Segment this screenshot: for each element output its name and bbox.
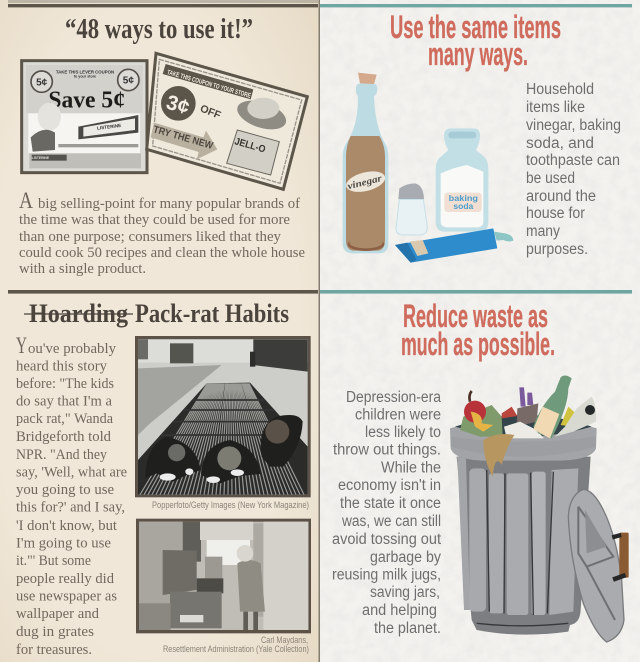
icon: vinegar bottle: vinegar xyxy=(346,173,383,192)
text: pack rat story: say, 'Well, what are xyxy=(16,464,127,480)
coupon: Save 5 cents Listerine: 5¢ xyxy=(123,76,134,87)
text: big selling-point: the time was that they could be used for more xyxy=(19,212,290,228)
coupon: Save 5 cents Listerine: LISTERINE xyxy=(32,156,50,160)
text: pack rat story: do say that I'm a xyxy=(16,394,113,410)
heading: use the same items xyxy=(390,9,561,72)
icon: baking soda jar: baking xyxy=(449,194,478,203)
trash can lid xyxy=(568,489,629,642)
coupon: Save 5 cents Listerine: Save 5¢ xyxy=(48,86,125,113)
text: depression-era children: less likely to xyxy=(365,424,441,441)
text: depression-era children: and helping xyxy=(362,602,437,619)
text: household items: house for xyxy=(526,205,585,222)
text: pack rat story: you going to use xyxy=(16,482,114,498)
text: big selling-point: big selling-point for many popular brands of xyxy=(38,196,300,212)
text: pack rat story: it."' But some xyxy=(16,553,91,569)
panel: use the same items xyxy=(343,9,621,263)
text: pack rat story: for treasures. xyxy=(16,642,92,658)
text: pack rat story: I'm going to use xyxy=(16,536,111,552)
text: depression-era children: While the xyxy=(381,460,441,476)
text: pack rat story: ou've probably xyxy=(28,341,117,357)
text: depression-era children xyxy=(332,389,442,637)
text: depression-era children: Depression-era xyxy=(346,389,441,406)
text: depression-era children: children were xyxy=(355,406,441,424)
text: pack rat story: Y xyxy=(16,333,27,358)
coupon: Save 5 cents Listerine: 5¢ xyxy=(36,77,48,88)
coupon: 3 cents off Jell-O: JELL-O xyxy=(233,136,267,156)
photo: men looking through sidewalk grate xyxy=(135,336,311,497)
photo: girl in newspaper-walled kitchen xyxy=(136,519,311,633)
illustration: household items xyxy=(343,73,513,263)
text: depression-era children: the state it once xyxy=(340,495,441,512)
text: big selling-point xyxy=(19,188,305,277)
panel: left paper background xyxy=(0,0,319,662)
text: big selling-point: with a single product. xyxy=(19,261,146,277)
icon: vinegar bottle xyxy=(343,73,388,253)
panel: reduce waste xyxy=(332,298,629,642)
panel: pack-rat habits xyxy=(16,299,311,658)
heading: 48 ways: “48 ways to use it!” xyxy=(65,14,253,45)
text: household items: items like xyxy=(526,99,585,116)
icon: baking soda jar: soda xyxy=(453,202,474,211)
text: pack rat story: use newspaper as xyxy=(16,588,117,604)
heading: use the same items: many ways. xyxy=(428,36,528,72)
text: depression-era children: economy isn't in xyxy=(338,477,441,494)
coupon: 3 cents off Jell-O: TAKE THIS COUPON TO YOUR STORE xyxy=(166,69,252,100)
coupon: 3 cents off Jell-O xyxy=(147,53,307,189)
text: household items: be used xyxy=(526,170,575,187)
text: household items: Household xyxy=(526,81,594,98)
text: pack rat story: 'I don't know, but xyxy=(16,518,117,534)
panel: right paper background xyxy=(320,0,640,662)
text: pack rat story: wallpaper and xyxy=(16,606,100,622)
text: depression-era children: throw out things. xyxy=(333,442,441,458)
panel: 48 ways to use it xyxy=(19,14,307,277)
text: household items xyxy=(526,81,621,258)
coupon: 3 cents off Jell-O: OFF xyxy=(198,103,223,122)
coupon: 3 cents off Jell-O: 3¢ xyxy=(164,91,193,119)
coupon: Save 5 cents Listerine: TAKE THIS LEVER COUPON xyxy=(56,69,114,74)
text: household items: purposes. xyxy=(526,241,588,258)
text: pack rat story: before: "The kids xyxy=(16,376,114,392)
text: pack rat story: heard this story xyxy=(16,358,108,374)
text: household items: around the xyxy=(526,188,596,205)
text: big selling-point: than one purpose; consumers liked that they xyxy=(19,229,282,245)
text: depression-era children: saving jars, xyxy=(370,584,440,601)
text: pack rat story: dug in grates xyxy=(16,624,94,640)
trash contents xyxy=(460,376,596,477)
text: household items: vinegar, baking xyxy=(526,117,621,134)
icon: baking soda jar xyxy=(436,128,488,232)
heading: hoarding pack-rat habits: Hoarding xyxy=(29,299,128,328)
caption: Popperfoto: Popperfoto/Getty Images (New York Magazine) xyxy=(152,500,309,511)
caption: Carl Maydans: Carl Maydans, xyxy=(261,635,308,646)
text: pack rat story: pack rat," Wanda xyxy=(16,411,114,427)
text: depression-era children: avoid tossing out xyxy=(332,531,442,548)
text: household items: many xyxy=(526,223,560,240)
illustration: trash can xyxy=(450,376,629,642)
text: depression-era children: the planet. xyxy=(374,620,441,637)
coupon: Save 5 cents Listerine: LISTERINE xyxy=(97,123,122,131)
caption: Carl Maydans: Resettlement Administration (Yale Collection) xyxy=(163,644,309,655)
text: pack rat story: NPR. "And they xyxy=(16,447,108,463)
text: big selling-point: A xyxy=(19,188,33,213)
text: depression-era children: garbage by xyxy=(370,549,441,566)
caption: Carl Maydans xyxy=(163,635,309,655)
text: depression-era children: was, we can still xyxy=(341,513,441,530)
text: household items: toothpaste can xyxy=(526,152,620,169)
coupon: Save 5 cents Listerine: to your store xyxy=(74,75,96,79)
icon: salt shaker xyxy=(396,183,427,235)
coupon: 3 cents off Jell-O: TRY THE NEW xyxy=(152,124,215,152)
trash can body xyxy=(450,415,597,635)
text: pack rat story: people really did xyxy=(16,571,115,587)
coupon: Save 5 cents Listerine xyxy=(22,61,147,173)
text: pack rat story xyxy=(16,333,127,658)
text: pack rat story: this for?' and I say, xyxy=(16,500,125,516)
text: household items: soda, and xyxy=(526,135,594,152)
heading: hoarding pack-rat habits xyxy=(24,299,289,328)
heading: hoarding pack-rat habits: Pack-rat Habits xyxy=(135,299,289,328)
text: pack rat story: Bridgeforth told xyxy=(16,429,112,445)
text: depression-era children: reusing milk jugs, xyxy=(332,566,441,584)
heading: reduce waste xyxy=(401,298,555,362)
text: big selling-point: could cook 50 recipes and clean the whole house xyxy=(19,245,305,261)
icon: toothpaste tube xyxy=(395,228,513,263)
